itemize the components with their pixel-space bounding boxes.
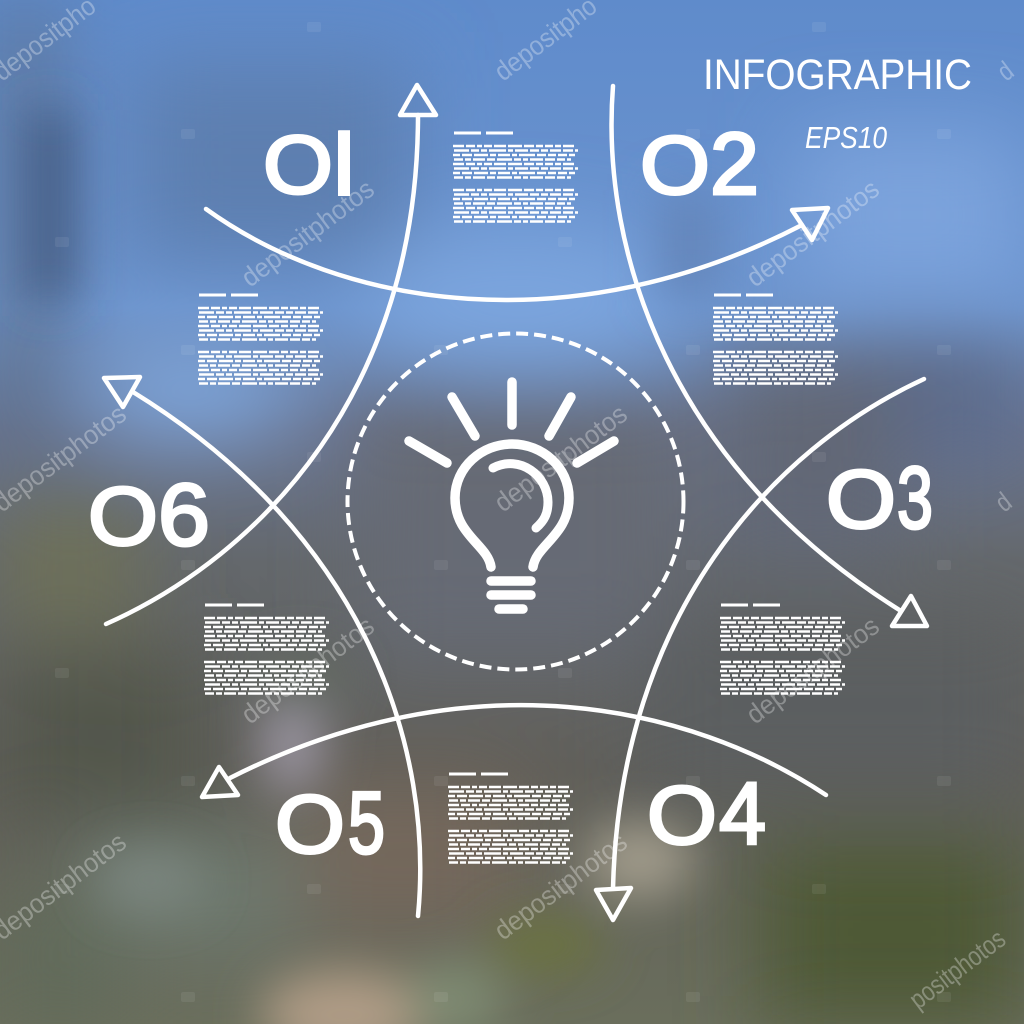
number 02: O [640, 118, 710, 212]
number 01: 1 [317, 113, 368, 215]
number 03: O [826, 452, 896, 546]
text block 2 [713, 295, 838, 384]
number 01: O [263, 118, 333, 211]
text block 3 [720, 605, 845, 694]
watermarks: d [992, 56, 1019, 87]
number 05 [275, 773, 385, 872]
arrow 2 [206, 208, 828, 300]
number 05: 5 [348, 773, 385, 872]
subtitle: EPS10 [805, 120, 887, 155]
number 01 [266, 130, 350, 196]
number 03 [826, 448, 933, 547]
text block 4 [448, 774, 573, 862]
watermarks: depositphotos [236, 611, 380, 730]
arrow 3 [612, 86, 927, 626]
text block 5 [204, 605, 329, 694]
watermarks: depositphotos [489, 399, 633, 518]
number 05: O [275, 778, 345, 870]
number 04: 4 [719, 764, 766, 863]
arrow 6 [104, 377, 420, 916]
watermarks: depositphotos [741, 611, 885, 730]
text block 1 [453, 133, 578, 222]
watermarks: depositphotos [741, 174, 885, 293]
arrow 1 [106, 85, 436, 624]
dashed circle [348, 334, 684, 670]
watermarks: d [990, 487, 1017, 518]
number 02: 2 [710, 114, 759, 213]
number 04 [647, 764, 766, 863]
number 06: 6 [158, 465, 210, 564]
title: INFOGRAPHIC [703, 51, 972, 99]
text block 6 [198, 295, 323, 384]
number 06: O [88, 470, 158, 562]
watermarks: depositphotos [236, 174, 380, 293]
number 03: 3 [897, 448, 933, 547]
watermarks: depositphotos [489, 827, 633, 946]
number 02 [640, 114, 759, 213]
icon: light bulb [409, 382, 614, 609]
arrow 4 [596, 379, 924, 920]
number 06 [88, 465, 210, 564]
number 04: O [647, 768, 717, 862]
arrow 5 [202, 705, 826, 797]
